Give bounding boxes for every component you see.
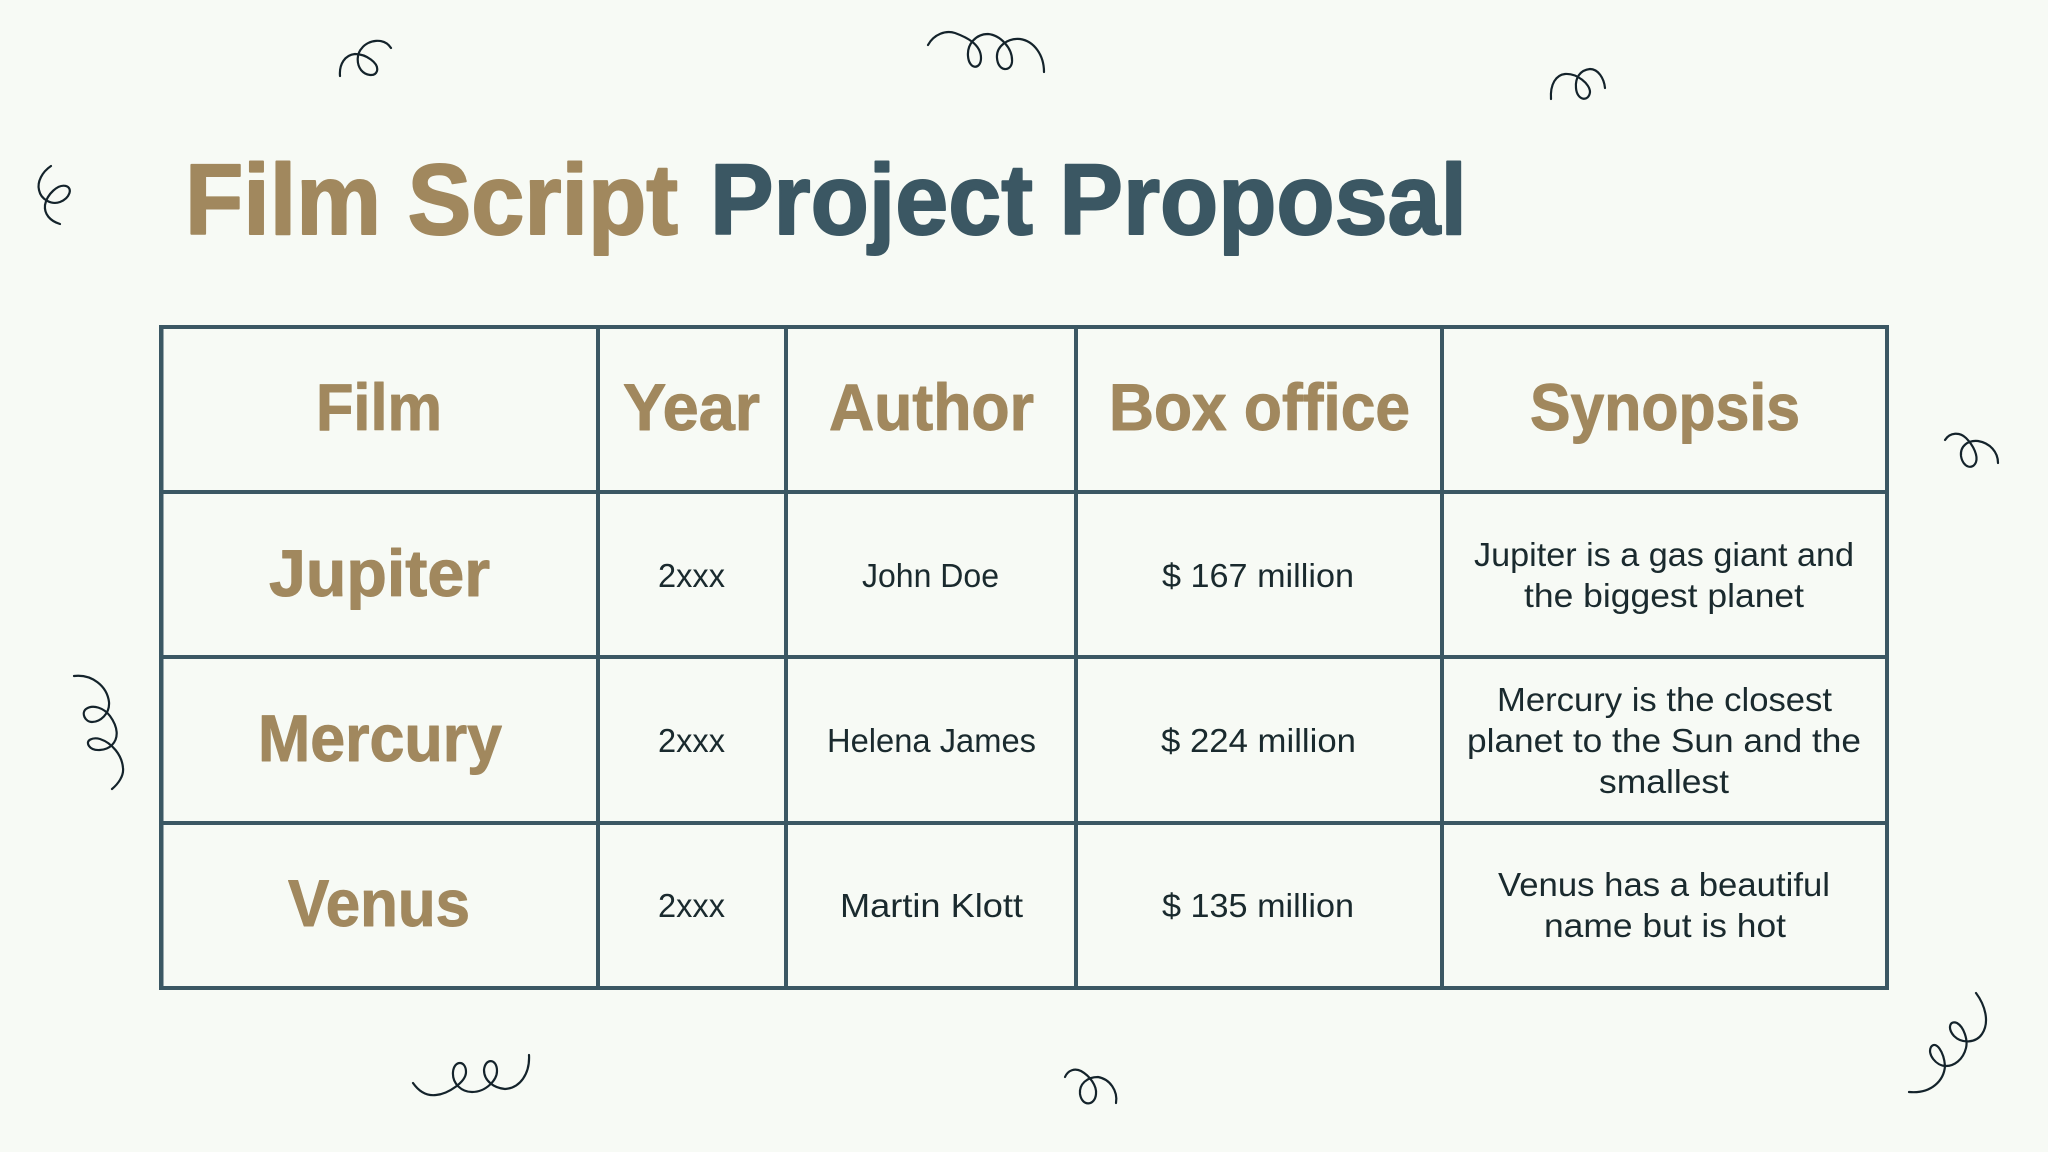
row: Mercury: Mercury is the closest: [1497, 681, 1832, 718]
table grid: [159, 325, 1889, 990]
row: Jupiter: [269, 536, 1854, 614]
row: Mercury: smallest: [1599, 763, 1729, 800]
row: Mercury: 2xxx: [658, 722, 725, 759]
title: Project Proposal: [710, 144, 1467, 256]
row: Venus: Venus has a beautiful: [1498, 866, 1830, 903]
row: Jupiter: 2xxx: [658, 557, 725, 594]
title: Film Script: [185, 144, 678, 256]
header row: Box office: [1109, 370, 1410, 444]
row: Venus: $ 135 million: [1162, 887, 1354, 924]
icon: squiggle left of title: [39, 166, 70, 224]
row: Mercury: Helena James: [827, 722, 1036, 759]
header row: Film: [316, 370, 442, 444]
header row: [316, 370, 1800, 444]
icon: squiggle bottom right: [1909, 993, 1986, 1092]
header row: Author: [829, 370, 1034, 444]
row: Jupiter: $ 167 million: [1162, 557, 1354, 594]
row: Mercury: Mercury: [258, 701, 502, 775]
row: Jupiter: Jupiter is a gas giant and: [1474, 536, 1854, 573]
icon: squiggle top centre: [928, 32, 1044, 72]
row: Mercury: planet to the Sun and the: [1467, 722, 1861, 759]
icon: squiggle top right: [1551, 69, 1605, 99]
row: Jupiter: Jupiter: [269, 536, 490, 610]
title: [185, 144, 1467, 256]
row: Venus: Venus: [288, 866, 470, 940]
icon: squiggle bottom centre: [1065, 1070, 1116, 1103]
row: Venus: 2xxx: [658, 887, 725, 924]
icon: squiggle left of table: [74, 676, 123, 789]
row: Jupiter: John Doe: [862, 557, 999, 594]
row: Venus: Martin Klott: [840, 887, 1023, 924]
icon: squiggle top left: [340, 41, 391, 76]
row: Venus: name but is hot: [1544, 907, 1786, 944]
header row: Year: [623, 370, 760, 444]
row: Venus: [288, 866, 1830, 944]
icon: squiggle right of table: [1945, 434, 1998, 467]
row: Jupiter: the biggest planet: [1524, 577, 1804, 614]
row: Mercury: [258, 681, 1861, 800]
icon: squiggle bottom left: [413, 1055, 529, 1095]
header row: Synopsis: [1530, 370, 1800, 444]
row: Mercury: $ 224 million: [1161, 722, 1356, 759]
table: [159, 325, 1889, 990]
